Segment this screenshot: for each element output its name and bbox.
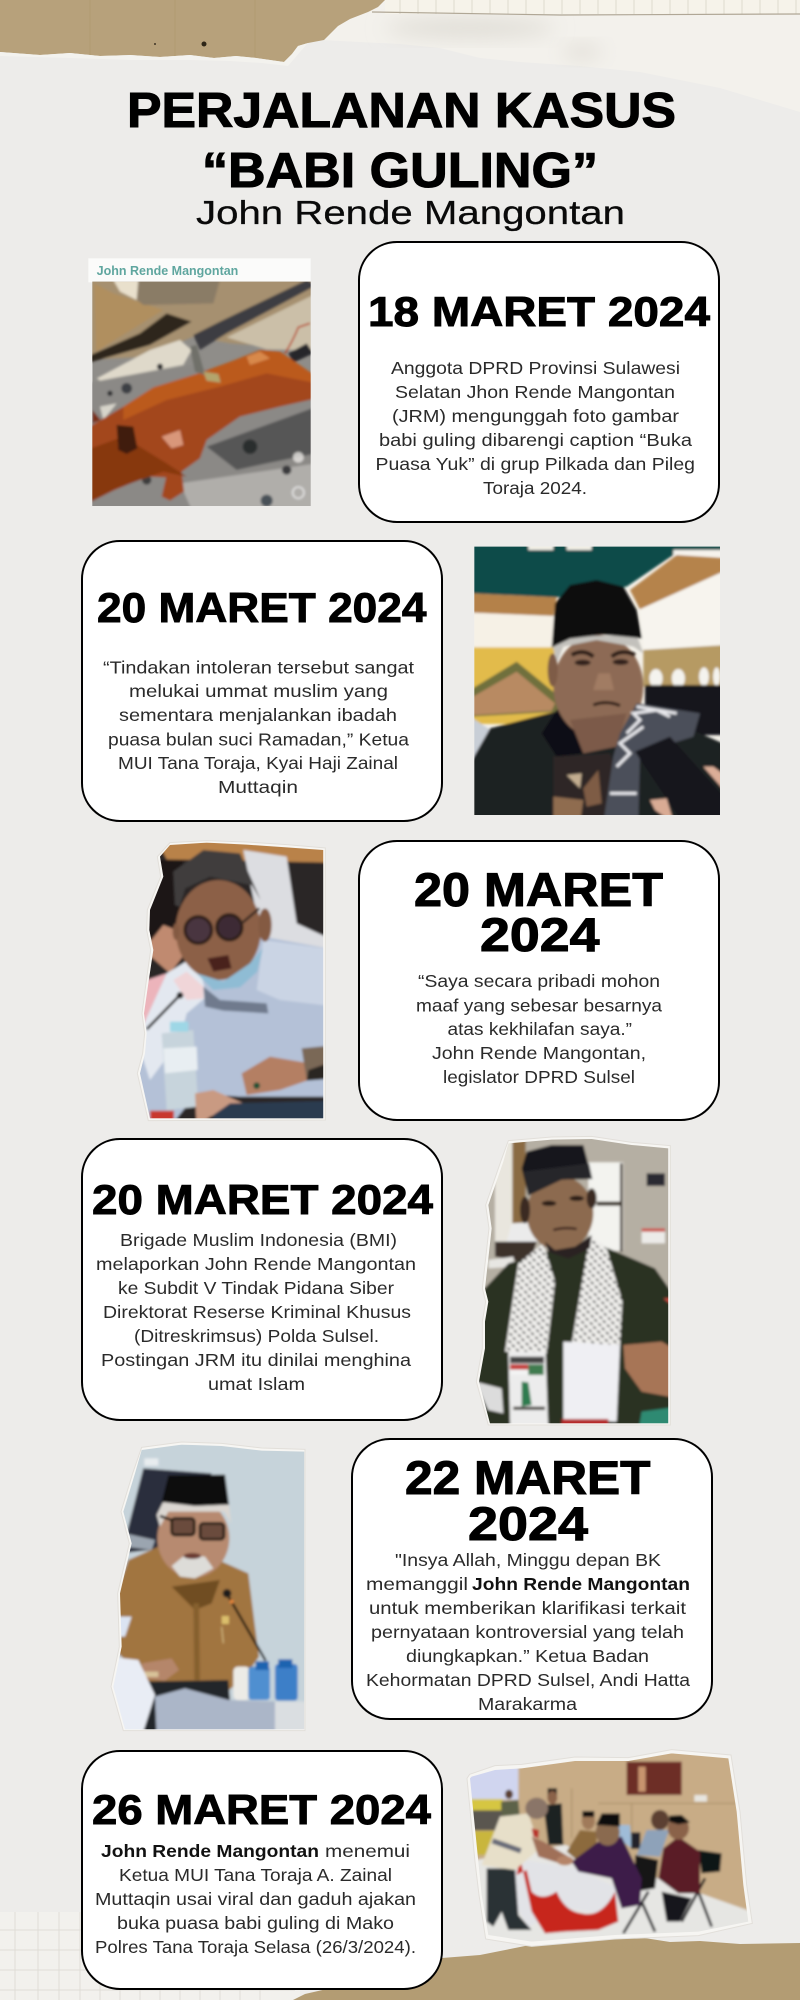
photo: BMI representative [472, 1132, 678, 1432]
title: PERJALANAN KASUS [127, 84, 676, 138]
body text: babi guling dibarengi caption “Buka [379, 430, 692, 450]
body text: (JRM) mengunggah foto gambar [392, 406, 679, 426]
subtitle: John Rende Mangontan [196, 194, 625, 231]
photo: Andi Hatta Marakarma [110, 1442, 306, 1731]
panel: 20 maret MUI [82, 541, 442, 821]
body text: John Rende Mangontan [101, 1841, 319, 1861]
panel: 26 maret [82, 1751, 442, 1989]
date: 20 MARET [414, 863, 663, 916]
body text: Postingan JRM itu dinilai menghina [101, 1350, 411, 1370]
body text [103, 658, 414, 797]
body text: Brigade Muslim Indonesia (BMI) [120, 1230, 397, 1250]
date: 2024 [468, 1497, 588, 1550]
body text: Polres Tana Toraja Selasa (26/3/2024). [95, 1937, 416, 1957]
body text: legislator DPRD Sulsel [443, 1067, 635, 1087]
body text: Direktorat Reserse Kriminal Khusus [103, 1302, 411, 1322]
body text: "Insya Allah, Minggu depan BK [395, 1550, 661, 1570]
body text [376, 358, 695, 498]
body text: memanggil [366, 1574, 468, 1594]
body text: menemui [325, 1841, 410, 1861]
date: 20 MARET 2024 [92, 1176, 434, 1223]
date: 20 MARET 2024 [97, 584, 427, 631]
date: 2024 [480, 908, 600, 961]
body text [366, 1550, 690, 1714]
photo: roasted pig screenshot [87, 258, 317, 513]
decoration: torn kraft paper top left [0, 0, 385, 66]
body text [416, 971, 662, 1087]
body text [96, 1230, 416, 1394]
body text: Ketua MUI Tana Toraja A. Zainal [119, 1865, 392, 1885]
body text: (Ditreskrimsus) Polda Sulsel. [134, 1326, 379, 1346]
date: 22 MARET [405, 1451, 651, 1504]
title [127, 84, 676, 198]
body text: buka puasa babi guling di Mako [117, 1913, 394, 1933]
body text: atas kekhilafan saya.” [448, 1019, 632, 1039]
body text: John Rende Mangontan, [432, 1043, 646, 1063]
body text: Marakarma [478, 1694, 577, 1714]
photo: John Rende Mangontan [137, 840, 326, 1121]
body text: ke Subdit V Tindak Pidana Siber [118, 1278, 394, 1298]
body text: umat Islam [208, 1374, 305, 1394]
body text: John Rende Mangontan [472, 1574, 690, 1594]
photo: MUI chairman [470, 540, 727, 823]
photo: meeting at Polres Tana Toraja [462, 1745, 758, 1952]
date [405, 1451, 651, 1550]
date: 18 MARET 2024 [368, 288, 711, 335]
body text: Kehormatan DPRD Sulsel, Andi Hatta [366, 1670, 690, 1690]
body text: Selatan Jhon Rende Mangontan [395, 382, 675, 402]
body text: MUI Tana Toraja, Kyai Haji Zainal [118, 753, 398, 773]
decoration: grid paper bottom left [0, 1912, 300, 2000]
panel: 18 maret [359, 242, 719, 522]
photo caption: John Rende Mangontan [97, 264, 238, 278]
body text: Puasa Yuk” di grup Pilkada dan Pileg [376, 454, 695, 474]
date [414, 863, 663, 961]
body text: maaf yang sebesar besarnya [416, 995, 662, 1015]
body text: Toraja 2024. [483, 478, 587, 498]
body text: Muttaqin usai viral dan gaduh ajakan [95, 1889, 416, 1909]
body text: Anggota DPRD Provinsi Sulawesi [391, 358, 680, 378]
body text: melaporkan John Rende Mangontan [96, 1254, 416, 1274]
body text: sementara menjalankan ibadah [119, 705, 397, 725]
body text: “Tindakan intoleran tersebut sangat [103, 658, 414, 678]
decoration: white crumpled paper top right [300, 0, 800, 112]
body text: melukai ummat muslim yang [129, 681, 388, 701]
decoration: torn kraft paper bottom right [293, 1936, 800, 2000]
panel: 20 maret apology [359, 841, 719, 1120]
panel: 20 maret BMI [82, 1139, 442, 1420]
date: 26 MARET 2024 [92, 1786, 432, 1833]
body text: diungkapkan.” Ketua Badan [406, 1646, 649, 1666]
body text [95, 1841, 416, 1957]
body text: Muttaqin [218, 777, 298, 797]
body text: “Saya secara pribadi mohon [418, 971, 660, 991]
body text: untuk memberikan klarifikasi terkait [369, 1598, 686, 1618]
body text: puasa bulan suci Ramadan,” Ketua [108, 730, 409, 750]
title: “BABI GULING” [202, 144, 598, 198]
body text: pernyataan kontroversial yang telah [371, 1622, 684, 1642]
panel: 22 maret [352, 1439, 712, 1719]
